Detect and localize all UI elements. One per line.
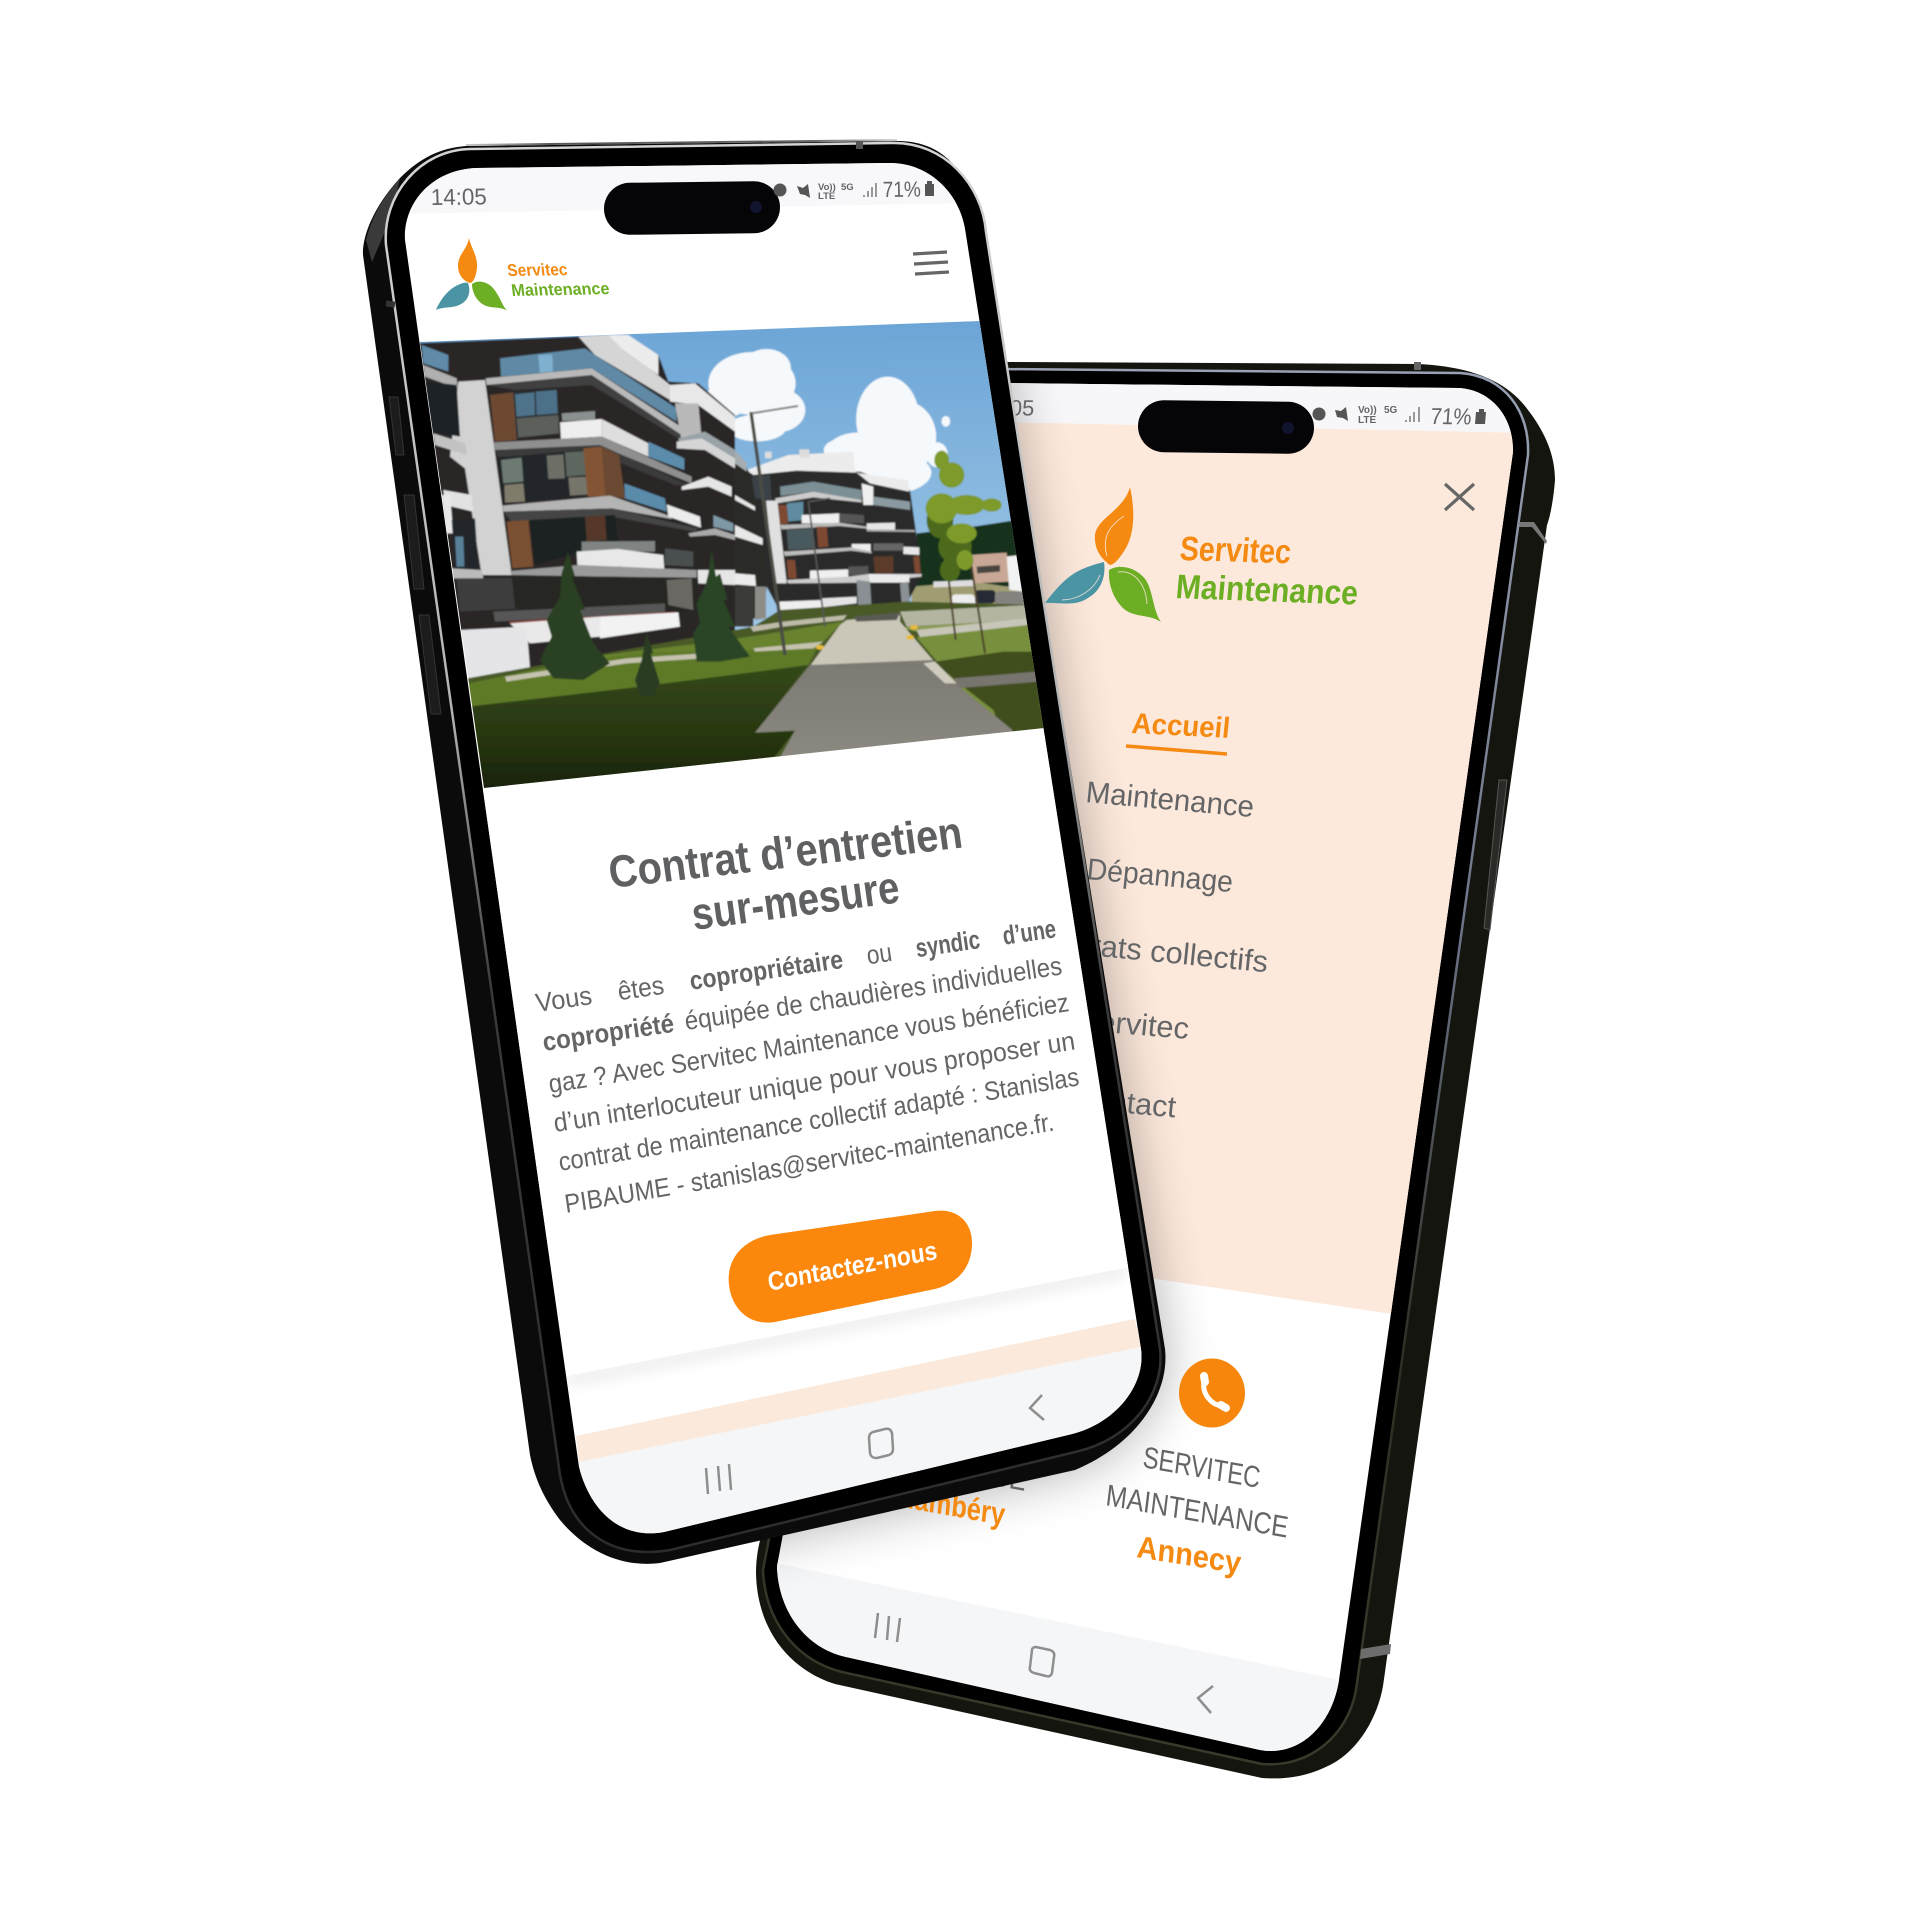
title line one: Contrat d’entretien: [605, 807, 965, 898]
nav icon home: [869, 1429, 893, 1458]
bollards: [816, 625, 918, 650]
battery icon: [1475, 409, 1486, 424]
antenna band left: [386, 300, 395, 308]
island pill: [604, 181, 780, 235]
camera lens: [1282, 422, 1294, 434]
antenna band bottom: [1360, 1644, 1391, 1659]
lamp arm: [752, 406, 798, 413]
second building: [747, 449, 922, 612]
white car: [952, 594, 975, 606]
left lawn shaded: [453, 665, 808, 797]
chambery line one: SERVITEC: [879, 1398, 1000, 1452]
battery percent: 71%: [882, 177, 921, 202]
line two: équipée de chaudières individuelles: [683, 950, 1064, 1036]
time partly hidden: 14:05: [979, 395, 1035, 421]
antenna band right: [1519, 522, 1547, 544]
right pale path: [917, 618, 1028, 637]
orange leaf: [1095, 487, 1133, 565]
status bar strip: [400, 150, 970, 214]
line four: d’un interlocuteur unique pour vous proposer un: [552, 1025, 1077, 1138]
status icons: [774, 177, 934, 202]
annecy address: [1104, 1441, 1290, 1581]
handset ends: [1204, 1376, 1226, 1408]
line one: Vous: [534, 980, 594, 1018]
fir small: [635, 633, 660, 697]
far forest: [917, 520, 1030, 587]
line two: [541, 950, 1064, 1057]
screen background: [390, 150, 1170, 1550]
white house: [1007, 555, 1024, 592]
walkway shaded: [755, 660, 1027, 763]
orange leaf: [458, 238, 477, 283]
antenna band top: [1414, 362, 1421, 370]
back phone bezel: [763, 369, 1528, 1764]
mute icon: [1335, 407, 1348, 421]
line one: syndic: [914, 924, 982, 963]
battery percent: 71%: [1430, 403, 1473, 429]
header logo: [436, 238, 610, 311]
5g label: 5G: [841, 182, 854, 193]
ground base: [440, 602, 1050, 803]
title line two: sur-mesure: [688, 861, 902, 940]
button pill: [729, 1211, 972, 1323]
upper left grass: [563, 622, 843, 660]
volte label: Vo)): [1358, 405, 1377, 416]
menu item servitec: Servitec: [1076, 1004, 1191, 1046]
peach band: [576, 1319, 1145, 1462]
walkway sun sliver: [923, 662, 957, 683]
button label: Contactez-nous: [766, 1235, 939, 1297]
island pill: [1138, 400, 1314, 454]
logo word servitec: Servitec: [506, 260, 568, 280]
walkway top shadow: [853, 613, 900, 622]
upper path: [750, 615, 847, 632]
hamburger icon: [913, 252, 949, 274]
house windows: [977, 565, 1000, 573]
right lawn sunlit: [917, 625, 1050, 763]
battery icon: [925, 181, 934, 196]
line one: [534, 913, 1058, 1018]
teal leaf: [436, 283, 469, 310]
card shadow: [567, 1270, 1127, 1380]
status bar strip: [1010, 383, 1511, 432]
side button: [1484, 780, 1507, 930]
line one: copropriétaire: [688, 944, 845, 996]
lawn path right: [753, 642, 823, 652]
nav icon back: [1030, 1395, 1044, 1420]
left lawn sunlit: [453, 648, 817, 713]
dark car: [975, 590, 996, 603]
phone icon: [1179, 1358, 1245, 1428]
back phone screen: [777, 383, 1514, 1751]
line two: copropriété: [541, 1008, 676, 1057]
tree foliage light: [926, 451, 1002, 570]
left side button one: [389, 397, 404, 455]
chambery line two: MAINTENANCE: [841, 1432, 1028, 1498]
back phone: [756, 362, 1555, 1778]
line three: gaz ? Avec Servitec Maintenance vous bénéficiez: [547, 987, 1071, 1099]
shadow cast by front phone: [777, 383, 1193, 1568]
peach menu panel: [1017, 422, 1514, 1314]
signal bars: [864, 183, 876, 197]
alarm icon: [1312, 408, 1326, 420]
chambery address: [908, 1484, 1024, 1530]
front phone bezel: [386, 143, 1160, 1552]
navigation bar background: [777, 1564, 1339, 1751]
tan ground: [912, 582, 1030, 607]
left side button two: [404, 495, 424, 589]
line one: ou: [865, 937, 894, 970]
antenna band: [856, 141, 863, 149]
right lawn shaded: [935, 652, 1050, 763]
grass strip: [900, 620, 1027, 632]
title: [605, 807, 965, 940]
close icon: [1445, 484, 1474, 510]
lte label: LTE: [818, 191, 835, 202]
menu item depannage: Dépannage: [1085, 853, 1235, 899]
logo word servitec: Servitec: [1178, 530, 1293, 571]
navigation bar: [579, 1347, 1165, 1570]
alarm icon: [774, 184, 786, 196]
logo word maintenance: Maintenance: [1174, 568, 1360, 613]
lte label: LTE: [1358, 415, 1376, 426]
signal bars: [1406, 407, 1419, 422]
clouds: [706, 349, 950, 495]
time: 14:05: [430, 183, 487, 210]
screen background: [760, 370, 1530, 1770]
tree foliage dark: [927, 502, 972, 582]
nav icon recent: [706, 1464, 731, 1494]
green leaf: [1109, 567, 1161, 622]
white card cover: [480, 728, 1135, 1376]
curb: [953, 672, 1038, 688]
green leaf: [472, 282, 508, 311]
line one: d’une: [1001, 913, 1058, 951]
ground and trees: [440, 406, 1050, 803]
annecy city: Annecy: [1135, 1529, 1243, 1581]
line one: êtes: [616, 970, 666, 1006]
fir left: [540, 552, 610, 680]
nav icon back: [1198, 1686, 1213, 1713]
top highlight: [466, 140, 897, 145]
front phone screen: [390, 150, 1170, 1570]
logo word maintenance: Maintenance: [510, 279, 610, 300]
main building: [415, 335, 735, 685]
orange disc: [1179, 1358, 1245, 1428]
menu item maintenance: Maintenance: [1084, 776, 1256, 824]
walkway sunlit: [810, 615, 933, 666]
body paragraph: [534, 913, 1081, 1219]
sky: [410, 315, 1050, 790]
chambery city: Chambéry: [879, 1475, 1007, 1532]
menu: [1087, 713, 1267, 1118]
camera island: [1138, 400, 1314, 454]
corner sheen: [366, 178, 400, 262]
5g label: 5G: [1384, 405, 1398, 416]
active underline: [1126, 746, 1227, 754]
line five: contrat de maintenance collectif adapté : Stanislas: [557, 1061, 1081, 1177]
hero photo: [410, 315, 1050, 803]
mute icon: [797, 184, 810, 198]
leaf veins: [1062, 516, 1147, 604]
fir right: [693, 550, 750, 662]
camera lens: [750, 201, 762, 213]
contact button: [729, 1211, 972, 1323]
logo large: [1045, 487, 1360, 622]
menu item contrats: Contrats collectifs: [1024, 923, 1270, 979]
tree trunks: [948, 557, 985, 653]
annecy line one: SERVITEC: [1141, 1441, 1262, 1495]
front phone: [363, 140, 1170, 1570]
status icons: [1312, 403, 1486, 429]
volte label: Vo)): [818, 182, 836, 193]
teal leaf: [1045, 562, 1104, 604]
main building right wing: [697, 450, 767, 630]
lawn path left: [505, 653, 703, 682]
camera island: [604, 181, 780, 235]
lamp post: [751, 412, 785, 655]
pink house: [970, 553, 1009, 583]
menu item active: Accueil: [1130, 708, 1231, 745]
low wall: [933, 580, 973, 587]
back phone body: [756, 362, 1555, 1778]
annecy line two: MAINTENANCE: [1104, 1479, 1290, 1545]
handset: [1204, 1382, 1221, 1406]
nav icon home: [1030, 1647, 1054, 1676]
right part of scene: [697, 449, 1030, 630]
silver car: [995, 591, 1024, 605]
nav icon recent: [875, 1613, 900, 1642]
front phone body: [363, 141, 1165, 1564]
menu item contact: Contact: [1069, 1082, 1178, 1124]
pale forecourt: [900, 605, 1030, 627]
left side button three: [419, 615, 441, 714]
line six: PIBAUME - stanislas@servitec-maintenance.fr.: [563, 1107, 1056, 1219]
second lamp: [808, 498, 830, 627]
